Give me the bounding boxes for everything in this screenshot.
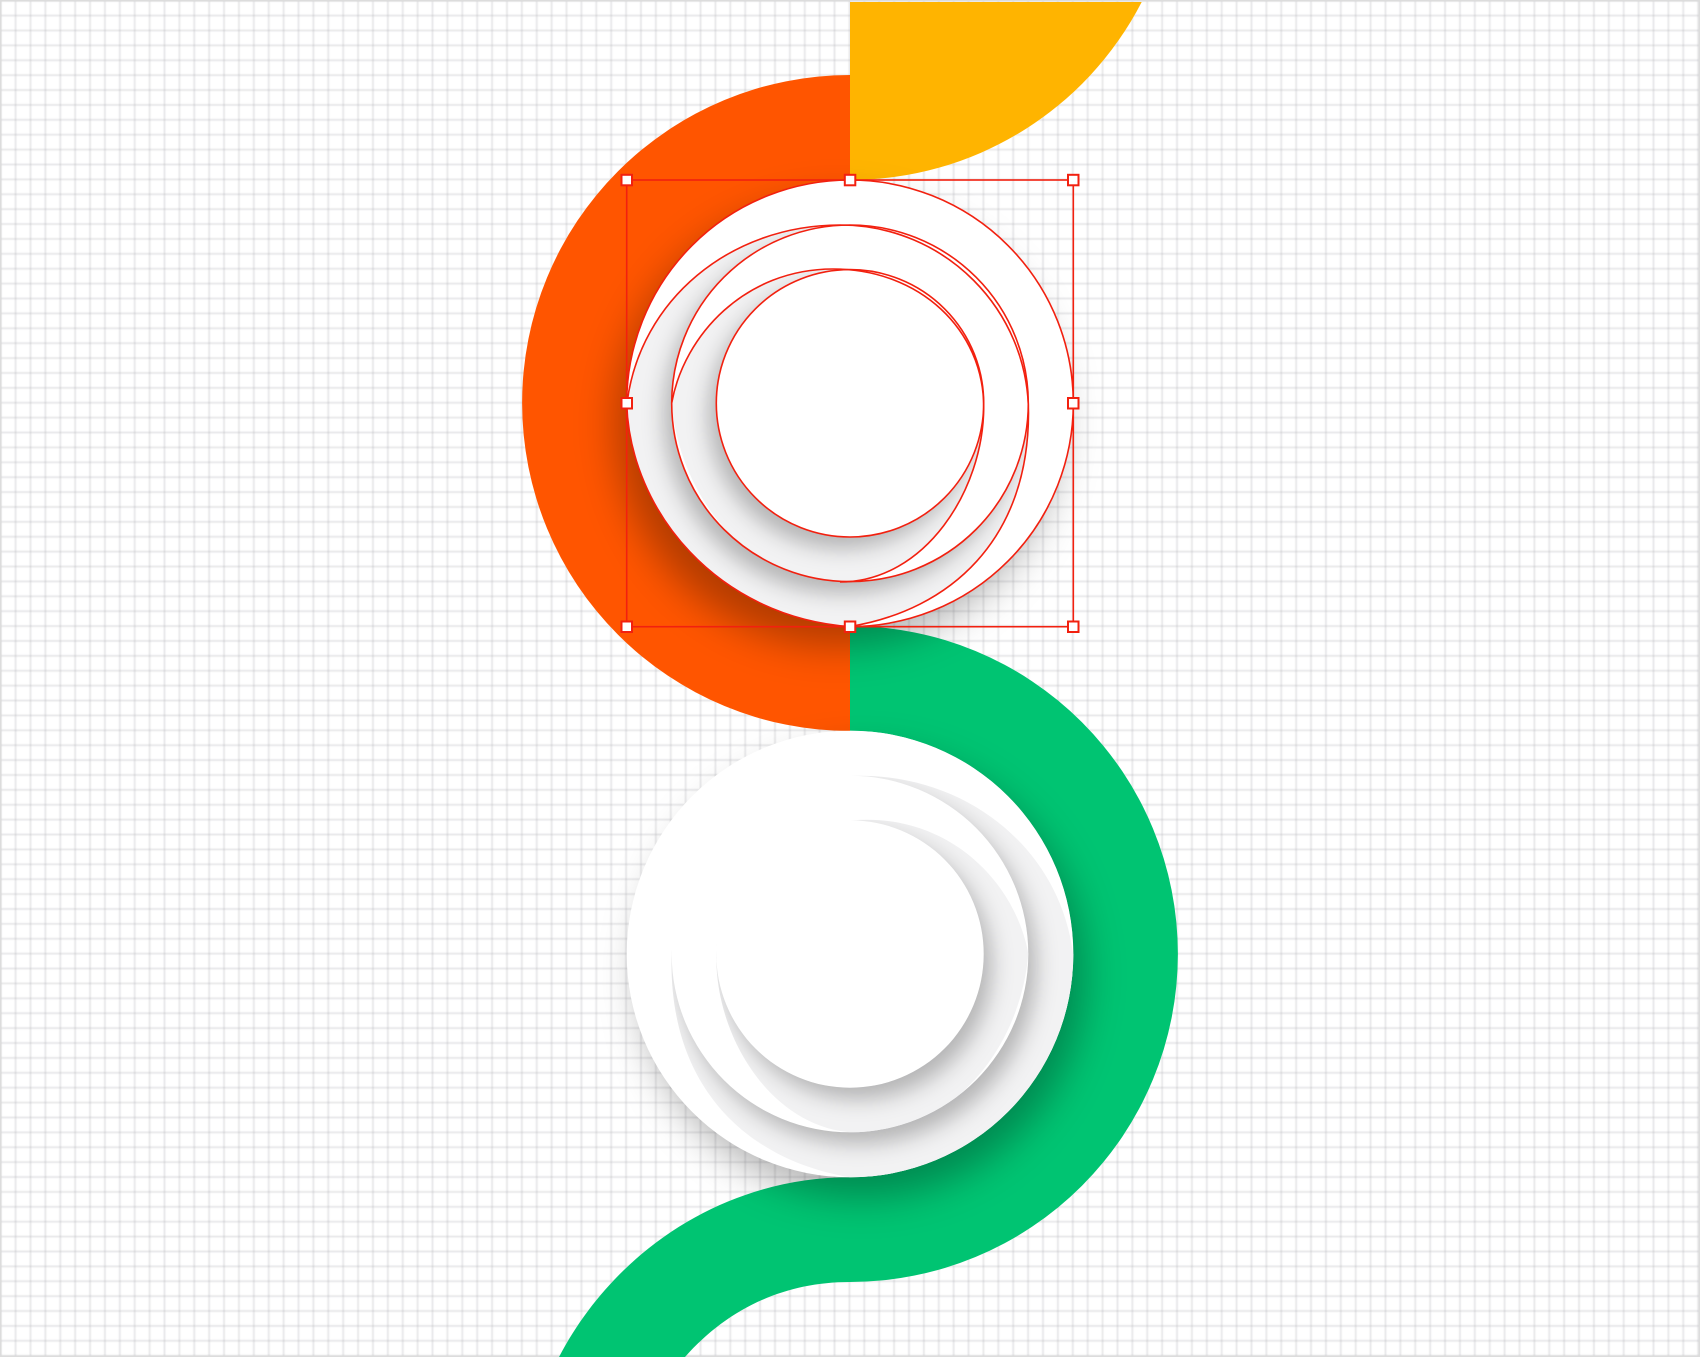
upper outer white shape: [627, 180, 1073, 627]
lower middle shadow: [680, 788, 1036, 1144]
upper middle white circle: [672, 225, 1028, 582]
lower middle white circle: [672, 776, 1028, 1132]
upper inner grey crescent: [672, 269, 984, 582]
upper middle shadow: [664, 237, 1020, 593]
green S-shaped band: [559, 626, 1178, 1357]
lower inner shadow: [724, 832, 992, 1099]
selection handles: [622, 175, 1078, 632]
lower outer shadow: [640, 753, 1084, 1197]
upper grey crescent: [627, 225, 1028, 626]
upper circle stack: [616, 180, 1073, 646]
upper outer shadow: [616, 202, 1060, 646]
lower outer white circle: [627, 731, 1073, 1177]
upper inner shadow: [708, 282, 976, 548]
lower inner grey crescent: [716, 820, 1028, 1133]
yellow quarter shape: [850, 2, 1142, 180]
lower grey crescent: [672, 776, 1073, 1177]
lower inner white circle: [716, 820, 984, 1088]
red selection outlines: [627, 180, 1073, 627]
upper inner white circle: [716, 270, 984, 537]
lower circle stack: [627, 731, 1084, 1197]
orange half disc: [522, 75, 850, 731]
